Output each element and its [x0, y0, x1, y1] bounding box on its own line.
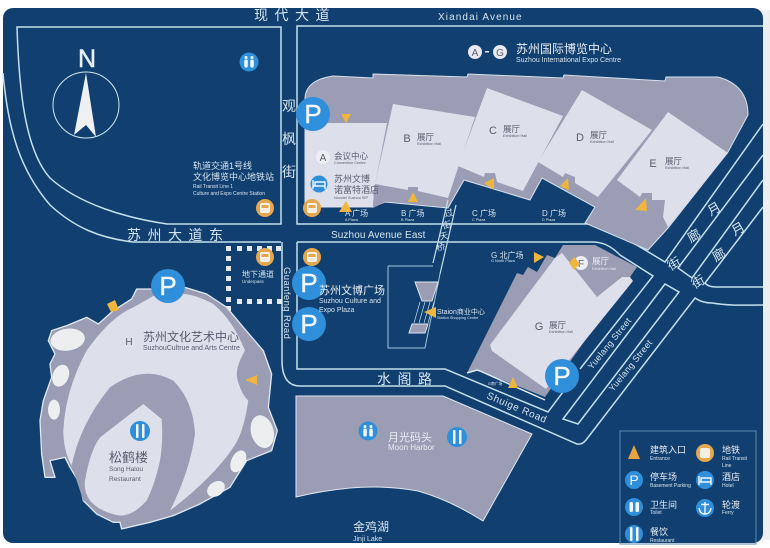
road labels: 廊 [710, 245, 728, 265]
parking icons: P [304, 99, 322, 129]
legend restaurant [625, 525, 675, 544]
G and F halls: G [535, 321, 543, 333]
hall labels: 苏州文博 [334, 173, 370, 184]
hall labels: 展厅 [417, 132, 435, 142]
legend hotel [696, 471, 740, 489]
plaza and lake labels: 金鸡湖 [353, 519, 389, 534]
road labels: 月 [705, 199, 723, 219]
compass: N [78, 45, 96, 73]
plaza and lake labels: Expo Plaza [319, 307, 355, 314]
hall labels: Convention Centre [334, 161, 366, 165]
road labels: Guanfeng Road [281, 267, 292, 339]
expo labels [468, 41, 621, 64]
parking icons [151, 97, 579, 393]
legend parking: 停车场 [650, 471, 677, 482]
expo centre building [305, 74, 748, 250]
plaza labels: C Plaza [472, 218, 486, 222]
plaza labels: G North Plaza [491, 259, 516, 263]
toilet icons [240, 52, 378, 440]
road labels: 月 [729, 219, 747, 239]
parking icons: P [553, 361, 571, 391]
plaza and lake labels: 轨道交通1号线 [193, 160, 252, 171]
plaza and lake labels: Underpass [242, 279, 265, 284]
road labels: 街 [689, 272, 707, 292]
legend entrance: 建筑入口 [650, 444, 686, 455]
pedestrian bridge: 桥 [435, 240, 446, 253]
pedestrian bridge: 街 [441, 218, 452, 231]
parking icons: P [300, 309, 318, 339]
plaza and lake labels: 地下通道 [242, 269, 274, 279]
road labels: Yuelang Street [607, 338, 654, 393]
G and F halls: G南广场 [488, 381, 503, 386]
hall labels: Novotel Suzhou SIP [334, 196, 368, 200]
hall A [305, 123, 387, 207]
hall E [617, 112, 728, 227]
G and F halls: F [578, 259, 584, 270]
plaza and lake labels: Jinji Lake [353, 536, 382, 543]
hall labels: 诺富特酒店 [334, 184, 379, 195]
plaza labels: A 广场 [345, 208, 368, 218]
moon harbor [296, 396, 532, 521]
legend [620, 431, 756, 544]
plaza and lake labels: Suzhou Culture and [319, 298, 381, 305]
road labels [127, 7, 747, 426]
culture and arts centre [40, 287, 278, 529]
plaza labels: D Plaza [542, 218, 556, 222]
legend entrance: Entrance [650, 456, 670, 462]
expo concourse gray [305, 74, 748, 250]
plaza labels: D 广场 [542, 208, 566, 218]
hall B [375, 104, 475, 198]
G and F halls: Exhibition Hall [592, 267, 616, 271]
hall labels: 会议中心 [334, 151, 369, 161]
plaza labels: A Plaza [345, 218, 359, 222]
pedestrian bridge: 天 [438, 230, 449, 242]
legend toilet: 卫生间 [650, 499, 677, 510]
road labels: 枫 [282, 131, 296, 147]
legend parking: Basement Parking [650, 483, 691, 489]
G and F halls: 展厅 [549, 320, 567, 330]
road labels: Yuelang Street [586, 316, 633, 371]
plaza and lake labels: Culture and Expo Centre Station [193, 191, 265, 197]
moon harbor: Moon Harbor [388, 443, 435, 452]
G and F halls: 展厅 [592, 256, 610, 266]
road network outlines [3, 26, 763, 444]
road labels: 街 [282, 164, 296, 180]
hall labels: B [403, 133, 411, 145]
road labels: Suzhou Avenue East [331, 230, 426, 241]
hall labels: C [489, 125, 497, 137]
underpass dotted path [226, 246, 282, 311]
plaza labels: G 北广场 [491, 250, 523, 260]
expo labels: A [472, 48, 479, 59]
G and F halls [467, 245, 637, 400]
legend ferry: Ferry [722, 510, 734, 516]
legend metro: 地铁 [722, 444, 740, 455]
parking icons: P [159, 271, 177, 301]
hall labels: D [576, 132, 584, 144]
legend toilet: Toilet [650, 510, 662, 516]
legend hotel: 酒店 [722, 471, 740, 482]
road labels: 观 [282, 98, 296, 114]
road labels: 水阁路 [377, 371, 438, 387]
road labels: 苏州大道东 [127, 227, 230, 243]
station shopping centre [409, 282, 485, 333]
station shopping centre: Staion商业中心 [437, 307, 485, 316]
plaza labels: B Plaza [401, 218, 415, 222]
pedestrian bridge: 过 [443, 206, 454, 219]
expo labels: 苏州国际博览中心 [516, 41, 612, 56]
culture and arts centre: 松鹤楼 [109, 450, 148, 465]
pedestrian bridge [388, 200, 456, 348]
moon harbor: 月光码头 [388, 430, 432, 444]
parking icons: P [300, 268, 318, 298]
hall labels: Exhibition Hall [665, 166, 689, 170]
road labels: Shuige Road [485, 391, 548, 426]
metro icons [256, 199, 321, 266]
legend restaurant: 餐饮 [650, 526, 668, 537]
road labels: Xiandai Avenue [438, 12, 523, 23]
plaza and lake labels: 苏州文博广场 [319, 283, 385, 297]
legend ferry [696, 499, 740, 517]
legend parking: P [629, 472, 639, 488]
compass [53, 45, 119, 138]
expo labels: G [496, 48, 504, 59]
legend metro: Rail Transit [722, 456, 748, 462]
legend entrance [628, 444, 686, 462]
hall labels: Exhibition Hall [590, 140, 614, 144]
hall labels: 展厅 [503, 124, 521, 134]
road labels: 廊 [685, 226, 703, 246]
legend parking [625, 471, 691, 489]
hall D [538, 90, 652, 197]
hall labels: Exhibition Hall [417, 142, 441, 146]
culture and arts centre: Restaurant [109, 476, 141, 483]
legend hotel: Hotel [722, 483, 734, 489]
road labels: 街 [665, 254, 683, 274]
hall labels [316, 124, 689, 200]
hall labels: A [320, 153, 327, 164]
culture and arts centre: H [125, 337, 133, 348]
culture and arts centre: 苏州文化艺术中心 [143, 329, 239, 344]
G and F halls: Exhibition Hall [549, 330, 573, 334]
plaza and lake labels: 文化博览中心地铁站 [193, 171, 274, 182]
plaza and lake labels: Rail Transit Line 1 [193, 184, 233, 190]
hall C [458, 88, 563, 191]
plaza labels: C 广场 [472, 208, 496, 218]
hotel icon [310, 176, 328, 192]
entrance arrows [107, 114, 647, 388]
legend metro: Line [722, 463, 732, 469]
road labels: 现代大道 [254, 7, 336, 23]
culture and arts centre: Song Halou [109, 466, 143, 473]
hall labels: E [649, 158, 657, 170]
hall labels: 展厅 [665, 156, 683, 166]
plaza labels: B 广场 [401, 208, 425, 218]
culture and arts centre: SuzhouCultrue and Arts Centre [143, 345, 240, 352]
legend metro [696, 444, 748, 469]
expo labels: Suzhou International Expo Centre [516, 57, 621, 64]
plaza labels [345, 208, 566, 263]
station shopping centre: Station Shopping Centre [437, 316, 478, 320]
legend ferry: 轮渡 [722, 499, 740, 510]
legend toilet [625, 498, 677, 516]
hall labels: 展厅 [590, 130, 608, 140]
plaza and lake labels [193, 160, 389, 543]
restaurant icons [130, 421, 467, 447]
legend restaurant: Restaurant [650, 538, 675, 544]
hall labels: Exhibition Hall [503, 134, 527, 138]
